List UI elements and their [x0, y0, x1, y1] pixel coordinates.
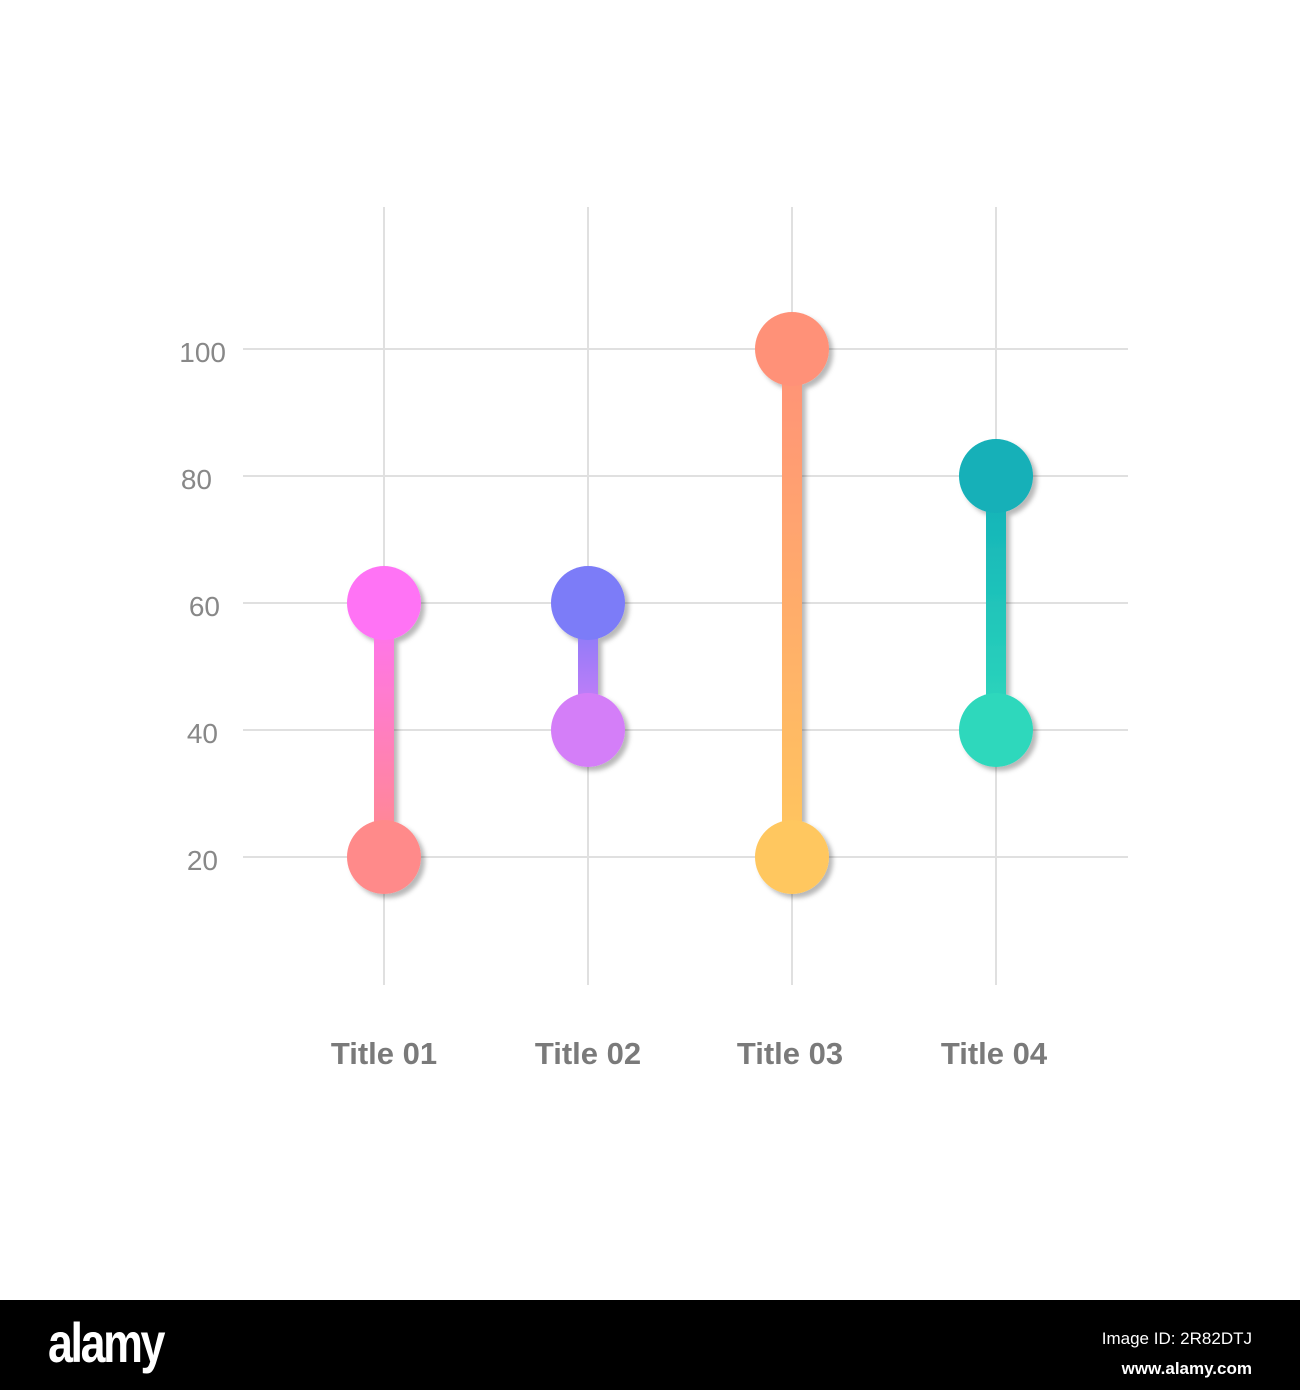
x-axis labels: Title 03 [737, 1036, 843, 1071]
series: Title 01 [347, 566, 421, 894]
series: Title 04 [959, 439, 1033, 767]
logo: alamy [48, 1311, 163, 1374]
y-axis labels [179, 337, 226, 876]
x-axis labels: Title 04 [941, 1036, 1048, 1071]
image id: Image ID: 2R82DTJ [1102, 1329, 1252, 1348]
x-axis labels: Title 01 [331, 1036, 437, 1071]
x-axis labels: Title 02 [535, 1036, 641, 1071]
series: Title 03 [755, 312, 829, 894]
y-axis labels: 60 [189, 591, 220, 622]
footer bar [0, 1300, 1300, 1390]
series: Title 02 [551, 566, 625, 767]
image id [1102, 1329, 1252, 1378]
y-axis labels: 20 [187, 845, 218, 876]
x-axis labels [331, 1036, 1048, 1071]
y-axis labels: 100 [179, 337, 226, 368]
y-axis labels: 40 [187, 718, 218, 749]
y-axis labels: 80 [181, 464, 212, 495]
image id: www.alamy.com [1122, 1359, 1252, 1378]
